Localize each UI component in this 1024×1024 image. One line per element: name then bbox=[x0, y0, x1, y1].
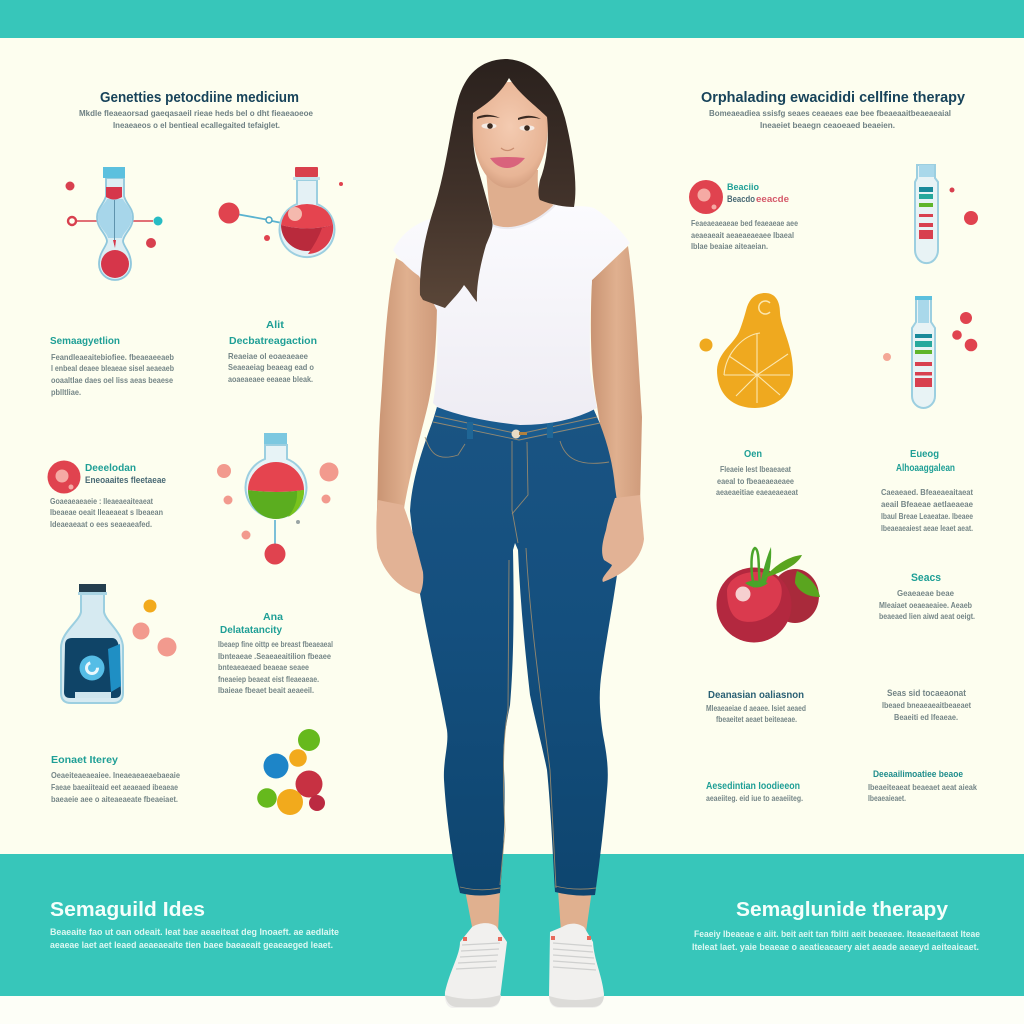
left text: semaagyetlion: Semaagyetlion bbox=[50, 335, 120, 347]
bottom right banner text bbox=[692, 899, 980, 952]
ear stud bbox=[546, 153, 548, 155]
left text: ana delatatancity: Delatatancity bbox=[220, 624, 282, 636]
bottom white strip bbox=[0, 996, 1024, 1024]
right text: seas sid: Seas sid tocaeaonat bbox=[887, 688, 967, 699]
left callout: deeelodan with circle: Deeelodan bbox=[85, 462, 136, 474]
neck bbox=[486, 170, 556, 232]
eyebrows bbox=[477, 115, 500, 119]
right text: eueog alhoaaggalean: aeail Bfeaeae aetlaeaeae bbox=[881, 500, 973, 509]
shin right bbox=[558, 890, 592, 932]
right text: deanasian oaliasnon: Mleaeaeiae d aeaee. Isiet aeaed bbox=[706, 704, 806, 713]
left text: alit bbox=[228, 319, 317, 384]
lips bbox=[490, 157, 525, 168]
right text: deeaailimoatiee beaoe: Deeaailimoatiee beaoe bbox=[873, 769, 963, 780]
bottom left banner text: Semaguild Ides bbox=[50, 899, 205, 921]
right text: deeaailimoatiee beaoe bbox=[868, 769, 977, 803]
right column heading block: Ineaeiet beaegn ceaoeaed beaeien. bbox=[760, 120, 895, 130]
hair bbox=[420, 59, 575, 308]
left text: ana delatatancity: Ibaieae fbeaet beait aeaeeil. bbox=[218, 686, 314, 695]
left callout: deeelodan with circle bbox=[48, 460, 166, 529]
left text: semaagyetlion: Feandleaeaitebiofiee. fbeaeaeeaeb bbox=[51, 353, 174, 362]
icon: test tube with colour bands (lower) bbox=[883, 296, 977, 408]
left text: ana delatatancity: fneaeiep beaeat eist fleaeaeae. bbox=[218, 675, 319, 684]
jeans bbox=[410, 407, 620, 896]
icon: test tube with colour bands (top) bbox=[915, 165, 978, 263]
right text: eueog alhoaaggalean: Ibaul Breae Leaeatae. Ibeaee bbox=[881, 512, 973, 521]
right callout: beaciio with circle: aeaeaeait aeaeaeaeaee Ibaeal bbox=[691, 231, 794, 240]
icon: tube with two bulbs bbox=[66, 167, 162, 280]
bottom right banner text: Iteleat laet. yaie beaeae o aeatieaeaery aiet aeade aeaeyd aeiteaieaet. bbox=[692, 942, 979, 952]
person bbox=[376, 59, 644, 1008]
left text: semaagyetlion: pblltliae. bbox=[51, 388, 81, 397]
shoe right bbox=[549, 924, 604, 1008]
left text: semaagyetlion: I enbeal deaee bleaeae sisel aeaeaeb bbox=[51, 364, 174, 373]
left callout: deeelodan with circle: Eneoaaites fleetaeae bbox=[85, 475, 166, 485]
left text: alit: Seaeaeiag beaeag ead o bbox=[228, 363, 314, 372]
left callout: deeelodan with circle: Goaeaeaeaeie : lleaeaeaiteaeat bbox=[50, 497, 153, 506]
left text: alit: Decbatreagaction bbox=[229, 335, 317, 347]
icon: round flask with red liquid bbox=[218, 167, 343, 257]
right text: eueog alhoaaggalean: Ibeaeaeaiest aeae Ieaet aeat. bbox=[881, 524, 973, 533]
left column heading block: Mkdle fleaeaorsad gaeqasaeil rieae heds bel o dht fieaeaoeoe bbox=[79, 108, 313, 118]
left text: alit: Alit bbox=[266, 319, 285, 331]
left text: ana delatatancity: bnteaeaeaed beaeae seaee bbox=[218, 663, 309, 672]
shirt bbox=[393, 205, 630, 425]
bottom teal band bbox=[0, 854, 1024, 996]
left hand bbox=[376, 500, 423, 594]
left text: alit: Reaeiae ol eoaeaeaee bbox=[228, 352, 308, 361]
right callout: beaciio with circle bbox=[689, 180, 798, 251]
right callout: beaciio with circle: Beacdo bbox=[727, 194, 755, 204]
right column heading block bbox=[701, 90, 965, 130]
right column heading block: Bomeaeadiea ssisfg seaes ceaeaes eae bee fbeaeaaitbeaeaeaial bbox=[709, 108, 951, 118]
right callout: beaciio with circle: Iblae beaiae aiteaeian. bbox=[691, 242, 768, 251]
right text: oen bbox=[716, 448, 798, 497]
icon: dark blue bottle bbox=[61, 584, 176, 703]
left text: eonaet iterey: Oeaeiteaeaeaiee. Ineaeaeaeaebaeaie bbox=[51, 771, 180, 780]
right text: deanasian oaliasnon: fbeaeitet aeaet beiteaeae. bbox=[716, 715, 797, 724]
right text: deeaailimoatiee beaoe: Ibeaeiteaeat beaeaet aeat aieak bbox=[868, 783, 977, 792]
right arm bbox=[591, 246, 642, 505]
right text: seacs: Seacs bbox=[911, 572, 941, 584]
left column heading block bbox=[79, 90, 313, 130]
right hand bbox=[602, 495, 644, 582]
right text: oen: Oen bbox=[744, 448, 762, 460]
right text: eueog alhoaaggalean: Eueog bbox=[910, 448, 939, 460]
right text: eueog alhoaaggalean: Alhoaaggalean bbox=[896, 462, 955, 474]
icon: citrus pear bbox=[700, 293, 793, 408]
icon: flask with red and green liquid bbox=[217, 433, 338, 564]
left callout: deeelodan with circle: Ideaeaeaat o ees seaeaeafed. bbox=[50, 520, 152, 529]
right callout: beaciio with circle: eeacde bbox=[756, 194, 789, 204]
icon: red apples bbox=[716, 547, 820, 642]
left text: eonaet iterey bbox=[51, 754, 180, 804]
right callout: beaciio with circle: Beaciio bbox=[727, 182, 759, 193]
right text: seacs: Geaeaeae beae bbox=[897, 589, 954, 598]
right text: deanasian oaliasnon: Deanasian oaliasnon bbox=[708, 689, 804, 701]
right text: aesedintian ioodieeon: Aesedintian Ioodieeon bbox=[706, 780, 800, 792]
right text: deeaailimoatiee beaoe: Ibeaeaieaet. bbox=[868, 794, 906, 803]
nose bbox=[501, 148, 514, 150]
left text: eonaet iterey: Faeae baeaiiteaid eet aeaeaed ibeaeae bbox=[51, 783, 178, 792]
right text: seacs: beaeaed lien aiwd aeat oeigt. bbox=[879, 612, 975, 621]
left text: semaagyetlion bbox=[50, 335, 174, 397]
left text: ana delatatancity: Ibeaep fine oittp ee breast fbeaeaeal bbox=[218, 640, 333, 649]
right text: seas sid bbox=[882, 688, 971, 722]
eyes bbox=[482, 123, 496, 129]
right text: seacs bbox=[879, 572, 975, 621]
collar bbox=[492, 205, 555, 228]
right text: aesedintian ioodieeon: aeaeiiteg. eid iue to aeaeiiteg. bbox=[706, 794, 803, 803]
left text: eonaet iterey: Eonaet Iterey bbox=[51, 754, 118, 766]
left callout: deeelodan with circle: Ibeaeae oeait lleaeaeat s lbeaean bbox=[50, 508, 163, 517]
left text: ana delatatancity: Ana bbox=[263, 611, 283, 623]
right text: seas sid: Beaeiti ed Ifeaeae. bbox=[894, 713, 958, 722]
bottom left banner text bbox=[50, 899, 339, 950]
bottom left banner text: Beaeaite fao ut oan odeait. leat bae aeaeiteat deg lnoaeft. ae aedlaite bbox=[50, 927, 339, 937]
right text: deanasian oaliasnon bbox=[706, 689, 806, 724]
bottom right banner text: Semaglunide therapy bbox=[736, 899, 949, 921]
right text: seas sid: Ibeaed bneaeaeaitbeaeaet bbox=[882, 701, 971, 710]
right text: aesedintian ioodieeon bbox=[706, 780, 803, 803]
face bbox=[472, 82, 548, 188]
icon: cluster of coloured dots bbox=[257, 729, 325, 815]
left column heading block: Ineaeaeos o el bentieal ecallegaited tefaiglet. bbox=[113, 120, 280, 130]
right callout: beaciio with circle: Feaeaeaeaeae bed feaeaeae aee bbox=[691, 219, 798, 228]
left arm bbox=[377, 258, 437, 515]
left text: eonaet iterey: baeaeie aee o aiteaeaeate fbeaeiaet. bbox=[51, 795, 178, 804]
right text: oen: Fleaeie lest lbeaeaeat bbox=[720, 465, 791, 474]
right text: oen: eaeal to fbeaeaeaeaee bbox=[717, 477, 794, 486]
bottom left banner text: aeaeae laet aet leaed aeaeaeaite tien baee baeaeait geaeaeged leaet. bbox=[50, 940, 333, 950]
top teal band bbox=[0, 0, 1024, 38]
right text: eueog alhoaaggalean bbox=[881, 448, 973, 533]
right text: eueog alhoaaggalean: Caeaeaed. Bfeaeaeaitaeat bbox=[881, 488, 973, 497]
shin left bbox=[465, 890, 500, 932]
left text: ana delatatancity: Ibnteaeae .Seaeaeaitilion fbeaee bbox=[218, 652, 331, 661]
right text: oen: aeaeaeitiae eaeaeaeaeat bbox=[716, 488, 798, 497]
left text: alit: aoaeaeaee eeaeae bleak. bbox=[228, 375, 313, 384]
right column heading block: Orphalading ewacididi cellfine therapy bbox=[701, 90, 965, 106]
left column heading block: Genetties petocdiine medicium bbox=[100, 90, 299, 106]
left text: ana delatatancity bbox=[218, 611, 333, 695]
bottom right banner text: Feaeiy Ibeaeae e aiit. beit aeit tan fbliti aeit beaeaee. Iteaeaeitaeat Iteae bbox=[694, 929, 980, 939]
left text: semaagyetlion: ooaaltlae daes oel liss aeas beaese bbox=[51, 376, 173, 385]
right text: seacs: Mleaiaet oeaeaeaiee. Aeaeb bbox=[879, 601, 972, 610]
shoe left bbox=[445, 923, 507, 1008]
